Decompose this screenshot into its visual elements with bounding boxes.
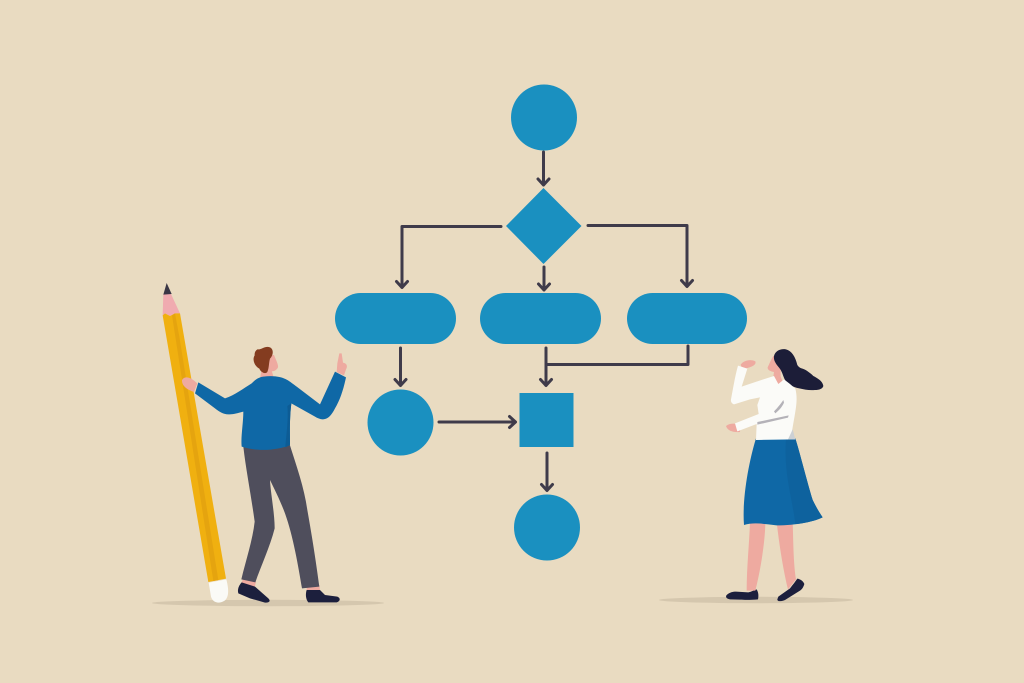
woman's lower hand — [726, 424, 741, 432]
pencil eraser — [209, 579, 228, 603]
blouse shading — [757, 400, 789, 425]
arrow: centre pill to square — [540, 348, 552, 386]
arrow: decision to centre pill — [538, 267, 550, 290]
arrow: square to end circle — [542, 453, 552, 490]
pencil lead tip — [163, 283, 172, 295]
left process pill — [335, 293, 456, 344]
pencil shade — [172, 313, 218, 581]
man's front shoe — [306, 590, 340, 602]
arrow: start to decision — [538, 152, 549, 185]
decision diamond — [506, 188, 582, 264]
arrow: left pill to left circle — [395, 348, 406, 386]
left shoe — [726, 589, 758, 600]
woman's neck and face — [768, 355, 783, 387]
square node — [520, 393, 574, 447]
man's pointing hand — [337, 353, 347, 375]
centre process pill — [480, 293, 601, 344]
flowchart — [335, 84, 747, 560]
woman's raised hand — [741, 360, 756, 370]
connector arrows — [395, 152, 692, 490]
man's ankles — [241, 579, 320, 591]
arrow: decision to left pill — [396, 226, 501, 288]
woman — [726, 349, 823, 601]
man's trousers — [241, 443, 319, 588]
right process pill — [627, 293, 747, 344]
left circle node — [368, 390, 434, 456]
woman's legs — [747, 522, 796, 591]
man's hand on pencil — [182, 377, 197, 392]
pencil wood — [163, 294, 180, 316]
blouse side shade — [788, 429, 795, 439]
ground shadow: woman — [659, 597, 853, 603]
skirt shade — [786, 438, 823, 524]
arrow: decision to right pill — [588, 226, 692, 286]
woman's hair — [774, 349, 823, 390]
man's face — [268, 355, 278, 371]
right shoe — [777, 579, 804, 601]
woman's skirt — [744, 438, 823, 525]
man's rear shoe — [238, 582, 270, 603]
man's neck — [260, 367, 274, 378]
sweater fold shade — [285, 403, 291, 447]
connector: right pill joins centre line — [547, 346, 688, 364]
arrow: left circle to square — [439, 416, 516, 428]
ground shadow: man — [152, 600, 384, 606]
start circle — [511, 84, 577, 150]
woman's blouse — [731, 366, 797, 440]
pencil — [163, 283, 228, 603]
man's hair — [254, 347, 273, 373]
woman's shoes — [726, 579, 804, 601]
pencil body — [163, 313, 226, 582]
man's sweater — [195, 372, 346, 450]
end circle — [514, 494, 580, 560]
man with pencil — [163, 283, 347, 603]
